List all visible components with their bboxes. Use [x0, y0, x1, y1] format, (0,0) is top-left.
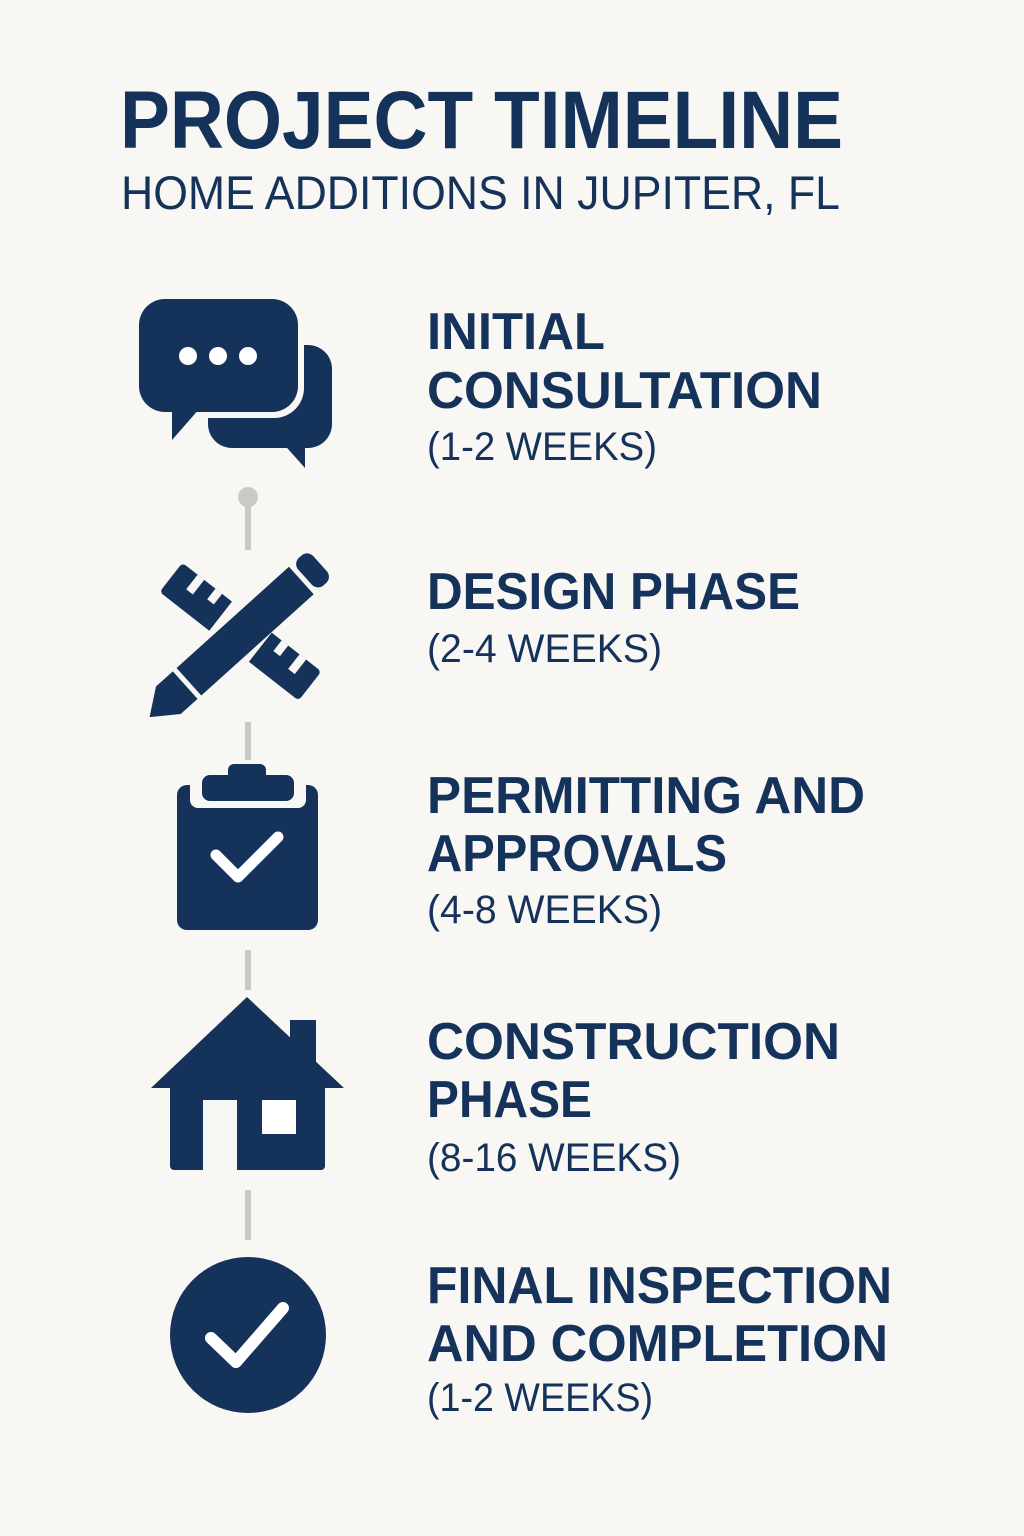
- step 1 text: (1-2 WEEKS): [427, 425, 657, 469]
- step 4: construction: [151, 997, 840, 1180]
- step 5 text: FINAL INSPECTION: [427, 1257, 892, 1315]
- subtitle: HOME ADDITIONS IN JUPITER, FL: [121, 166, 840, 219]
- step 3 text: (4-8 WEEKS): [427, 888, 662, 932]
- step 1 text: CONSULTATION: [427, 362, 822, 420]
- step 5 text: (1-2 WEEKS): [427, 1376, 653, 1420]
- step 1 text: INITIAL: [427, 303, 605, 361]
- icon: check circle: [170, 1257, 326, 1413]
- step 5: final inspection: [170, 1257, 892, 1420]
- step 2 text: [427, 563, 800, 671]
- title: [120, 75, 843, 219]
- connectors: [238, 487, 258, 1240]
- step 4 text: [427, 1013, 840, 1180]
- step 3 text: PERMITTING AND: [427, 767, 865, 825]
- step 4 text: PHASE: [427, 1071, 592, 1129]
- step 3: permitting: [177, 764, 865, 932]
- step 2: design phase: [134, 546, 800, 735]
- title: PROJECT TIMELINE: [120, 75, 843, 166]
- icon: ruler and pencil: [134, 546, 336, 735]
- step 1 text: [427, 303, 822, 469]
- step 2 text: DESIGN PHASE: [427, 563, 800, 621]
- step 3 text: APPROVALS: [427, 825, 727, 883]
- step 1: initial consultation: [133, 293, 822, 469]
- step 4 text: CONSTRUCTION: [427, 1013, 840, 1071]
- step 5 text: AND COMPLETION: [427, 1315, 888, 1373]
- icon: chat bubbles: [133, 293, 332, 468]
- step 4 text: (8-16 WEEKS): [427, 1136, 681, 1180]
- step 2 text: (2-4 WEEKS): [427, 627, 662, 671]
- icon: house: [151, 997, 344, 1172]
- icon: clipboard: [177, 764, 318, 930]
- step 3 text: [427, 767, 865, 932]
- step 5 text: [427, 1257, 892, 1420]
